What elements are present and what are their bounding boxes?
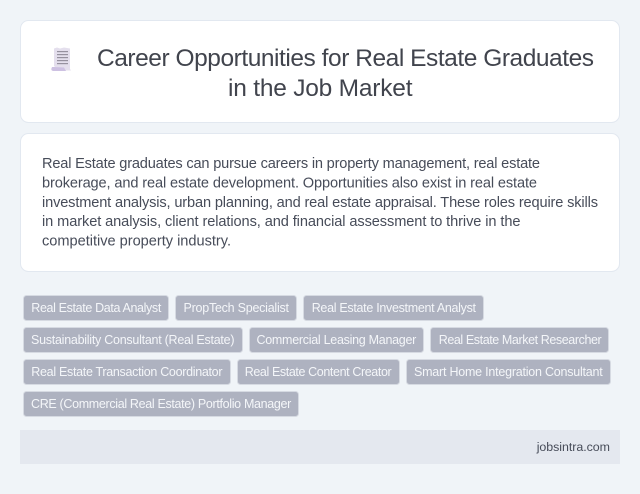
tag: Real Estate Content Creator	[238, 360, 400, 384]
tag: Real Estate Investment Analyst	[304, 296, 484, 320]
tag: Real Estate Market Researcher	[430, 328, 608, 352]
description text: in market analysis, client relations, and financial assessment to thrive in the	[42, 214, 520, 230]
footer source text: jobsintra.com	[536, 440, 610, 454]
tag: Real Estate Market Researcher: Real Estate Market Researcher	[439, 333, 602, 347]
tag: Real Estate Transaction Coordinator: Real Estate Transaction Coordinator	[31, 365, 222, 379]
description text: brokerage, and real estate development. Opportunities also exist in real estate	[42, 175, 537, 191]
title	[97, 45, 594, 102]
tag: CRE (Commercial Real Estate) Portfolio Manager	[24, 392, 298, 416]
panel: description	[20, 134, 620, 272]
tag: Commercial Leasing Manager: Commercial Leasing Manager	[256, 333, 416, 347]
tag: PropTech Specialist	[176, 296, 296, 320]
tag: Real Estate Content Creator: Real Estate Content Creator	[245, 365, 392, 379]
title: in the Job Market	[228, 75, 413, 102]
panel: career tags	[24, 296, 610, 416]
title: Career Opportunities for Real Estate Graduates	[97, 45, 594, 72]
tag: Smart Home Integration Consultant: Smart Home Integration Consultant	[414, 365, 603, 379]
icon: document scroll	[51, 48, 71, 71]
description text: investment analysis, urban planning, and real estate appraisal. These roles require skills	[42, 195, 598, 211]
tag: Sustainability Consultant (Real Estate): Sustainability Consultant (Real Estate)	[31, 333, 234, 347]
tag: Real Estate Data Analyst: Real Estate Data Analyst	[31, 301, 162, 315]
description text: Real Estate graduates can pursue careers in property management, real estate	[42, 156, 540, 172]
tag: CRE (Commercial Real Estate) Portfolio Manager: CRE (Commercial Real Estate) Portfolio Manager	[31, 397, 291, 411]
tag: Real Estate Investment Analyst: Real Estate Investment Analyst	[312, 301, 477, 315]
tag: Real Estate Transaction Coordinator	[24, 360, 230, 384]
tag: Smart Home Integration Consultant	[406, 360, 610, 384]
footer	[20, 430, 620, 464]
tag: PropTech Specialist: PropTech Specialist	[184, 301, 290, 315]
description text: competitive property industry.	[42, 234, 231, 250]
panel: header	[20, 20, 620, 122]
description text	[42, 156, 598, 250]
tag: Real Estate Data Analyst	[24, 296, 168, 320]
tag: Sustainability Consultant (Real Estate)	[24, 328, 242, 352]
tag: Commercial Leasing Manager	[250, 328, 424, 352]
